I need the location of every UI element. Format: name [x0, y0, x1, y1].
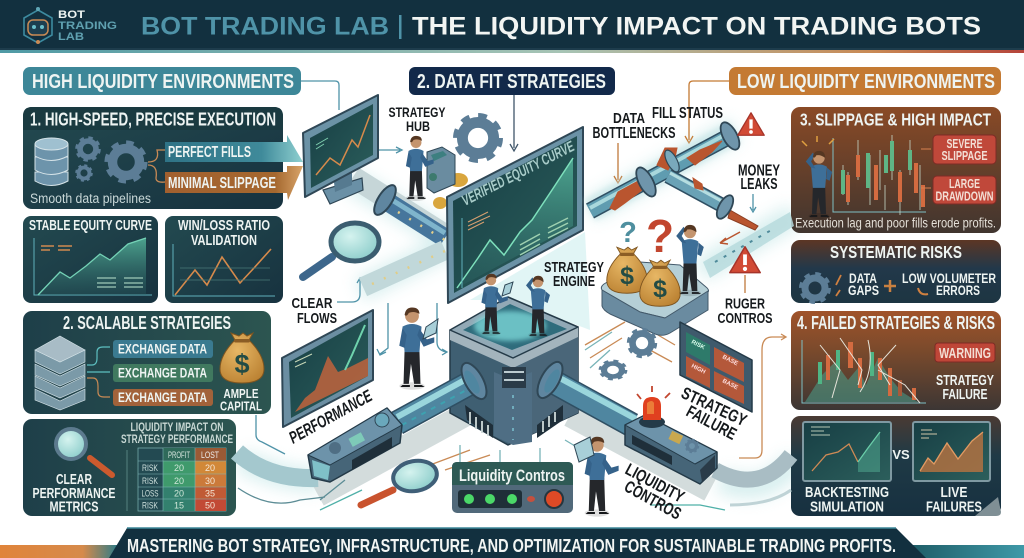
table: liquidity impact: PROFIT	[168, 450, 190, 460]
label: strategy engine: STRATEGY	[544, 260, 604, 276]
panel: clear performance metrics	[23, 419, 236, 516]
panel: win/loss ratio validation: WIN/LOSS RATIO	[178, 218, 270, 234]
table: liquidity impact: LOSS	[142, 488, 158, 498]
monitor: verified equity curve	[447, 127, 583, 303]
label: strategy hub: HUB	[406, 118, 430, 134]
screen: risk grid: BASE	[721, 354, 739, 367]
panel: backtesting vs live failures: FAILURES	[926, 498, 982, 516]
labels: exchange data: EXCHANGE DATA	[118, 364, 207, 380]
label: fill status: FILL STATUS	[652, 105, 723, 122]
label: strategy engine: ENGINE	[553, 274, 595, 290]
logo: BOT	[58, 9, 85, 21]
title	[141, 12, 981, 40]
label: money leaks: MONEY	[738, 162, 780, 180]
panel: high-speed precise execution: 1. HIGH-SPEED, PRECISE EXECUTION	[30, 110, 276, 130]
table: liquidity impact: 20	[205, 463, 215, 473]
screen: risk grid: HIGH	[690, 363, 706, 376]
label: clear flows	[292, 295, 337, 327]
panel: stable equity curve: STABLE EQUITY CURVE	[29, 218, 152, 234]
flow: right lower stream	[715, 455, 791, 505]
label: performance: PERFORMANCE	[286, 386, 376, 447]
label: strategy failure: FAILURE	[683, 402, 740, 444]
label: liquidity controls: CONTROS	[621, 477, 684, 524]
pipeline: rusty bottleneck pipes	[590, 119, 758, 230]
panel: clear performance metrics: CLEAR	[56, 472, 92, 488]
panel: systematic risks	[791, 240, 1001, 303]
table: liquidity impact: RISK	[142, 463, 158, 473]
panel: high liquidity heading: HIGH LIQUIDITY ENVIRONMENTS	[32, 71, 294, 93]
chart: backtest screen	[803, 422, 891, 481]
flow: low liquidity stream	[703, 212, 794, 278]
table: liquidity impact: RISK	[142, 500, 158, 510]
screen: risk grid: RISK	[690, 339, 706, 352]
panel: scalable strategies: 2. SCALABLE STRATEGIES	[63, 313, 231, 333]
label: strategy hub	[388, 104, 446, 134]
callout: large drawdown: DRAWDOWN	[936, 190, 994, 204]
panel: backtesting vs live failures: VS	[892, 447, 910, 462]
panel: systematic risks: DATA	[849, 271, 877, 286]
label: strategy failure: STRATEGY	[678, 383, 750, 430]
title: BOT TRADING LAB	[141, 12, 389, 40]
logo	[24, 7, 117, 44]
people on hub	[481, 274, 550, 338]
panel: win/loss ratio validation: VALIDATION	[191, 233, 257, 249]
glow behind flows	[240, 130, 795, 487]
panel: win/loss ratio validation	[165, 216, 283, 303]
panel: failed strategies and risks	[791, 311, 1001, 410]
platform: money bags: ?	[646, 210, 674, 262]
chart: live screen	[913, 422, 990, 481]
panel: failed strategies and risks: FAILURE	[942, 387, 988, 403]
platform: money bags: ?	[619, 217, 637, 249]
panel: clear performance metrics: PERFORMANCE	[32, 486, 116, 502]
pipeline: left hub pipe	[397, 359, 492, 425]
connector lines	[238, 81, 786, 510]
monitor: top left trading screen	[303, 95, 378, 204]
bar: minimal slippage: MINIMAL SLIPPAGE	[168, 175, 276, 192]
panel: backtesting vs live failures	[791, 416, 1001, 516]
logo: LAB	[58, 31, 84, 43]
callout: warning	[935, 343, 995, 362]
panel: scalable strategies	[23, 311, 271, 414]
label: data bottlenecks: DATA	[613, 111, 645, 127]
panel: clear performance metrics: METRICS	[50, 500, 99, 516]
callout: large drawdown: LARGE	[949, 177, 980, 191]
callout: severe slippage: SLIPPAGE	[942, 149, 988, 163]
panel: liquidity controls	[452, 462, 573, 513]
panel: high-speed precise execution	[23, 107, 303, 209]
logo: TRADING	[58, 20, 117, 32]
label: ruger controls: CONTROS	[718, 310, 772, 327]
panel: clear performance metrics: LIQUIDITY IMPACT ON	[130, 422, 224, 434]
panel: systematic risks: ERRORS	[936, 283, 980, 298]
table: liquidity impact: 50	[205, 500, 215, 510]
callout: severe slippage	[933, 135, 996, 164]
person: operator with tablet	[574, 437, 619, 517]
table: liquidity impact: RISK	[142, 476, 158, 486]
bar: minimal slippage	[165, 166, 303, 200]
table: liquidity impact: 35	[205, 488, 215, 498]
module: alarm connector	[625, 386, 717, 484]
icon: database	[35, 138, 68, 186]
panel: clear performance metrics: STRATEGY PERFORMANCE	[121, 434, 233, 446]
panel: high-speed precise execution: Smooth data pipelines	[30, 191, 151, 206]
label: clear flows: FLOWS	[297, 310, 337, 327]
panel: systematic risks: LOW VOLUMETER	[902, 271, 996, 286]
panel: scalable strategies: CAPITAL	[220, 400, 262, 414]
icon: warning top	[738, 113, 764, 135]
label: money leaks: LEAKS	[740, 176, 778, 193]
labels: exchange data: EXCHANGE DATA	[118, 340, 207, 356]
panel: stable equity curve	[23, 216, 158, 303]
table: liquidity impact: 15	[174, 500, 184, 510]
footer banner	[0, 528, 1024, 558]
panel: systematic risks: SYSTEMATIC RISKS	[830, 242, 962, 262]
table: liquidity impact: 20	[174, 463, 184, 473]
icon: magnifier lower	[361, 457, 439, 505]
panel: slippage and high impact	[791, 107, 1001, 233]
table: liquidity impact	[138, 448, 226, 511]
heading: data fit strategies: 2. DATA FIT STRATEGIES	[417, 71, 606, 93]
screen: risk grid: BASE	[721, 378, 739, 391]
panel: high liquidity heading	[23, 67, 301, 95]
module: left connector	[308, 408, 402, 482]
ground shadows under pipes	[318, 412, 710, 495]
callout: warning: WARNING	[939, 345, 991, 362]
bar: perfect fills	[165, 135, 303, 162]
panel: backtesting vs live failures: SIMULATION	[810, 498, 884, 516]
monitor: verified equity curve: VERIFIED EQUITY CURVE	[459, 138, 578, 210]
callout: severe slippage: SEVERE	[946, 137, 982, 151]
chart: candlesticks	[841, 135, 925, 215]
panel: failed strategies and risks: STRATEGY	[936, 373, 994, 389]
label: ruger controls	[718, 296, 772, 327]
panel: systematic risks: GAPS	[848, 283, 879, 298]
terminal: strategy hub kiosk	[427, 147, 468, 209]
label: clear flows: CLEAR	[292, 295, 333, 312]
label: data bottlenecks: BOTTLENECKS	[592, 125, 676, 142]
panel: liquidity controls: Liquidity Contros	[459, 466, 565, 485]
icon: magnifier	[56, 429, 112, 475]
icon: magnifier clear flows	[303, 223, 379, 277]
platform: money bags	[601, 210, 708, 335]
flow: left lower stream	[237, 452, 318, 478]
label: strategy engine	[544, 260, 604, 290]
pipeline: right hub pipe	[532, 358, 636, 425]
label: liquidity controls: LIQUIDITY	[622, 460, 688, 507]
labels: exchange data	[113, 340, 213, 406]
label: money leaks	[738, 162, 780, 193]
callout: large drawdown	[933, 176, 996, 204]
table: liquidity impact: 20	[174, 488, 184, 498]
icon: server stack	[35, 336, 85, 410]
label: ruger controls: RUGER	[725, 296, 765, 312]
screen: risk grid	[680, 322, 752, 412]
label: strategy hub: STRATEGY	[388, 104, 446, 120]
bar: perfect fills: PERFECT FILLS	[168, 144, 251, 161]
panel: scalable strategies: AMPLE	[224, 387, 258, 401]
light beam under equity monitor	[470, 232, 590, 330]
icon: warning lower	[730, 247, 760, 273]
title: THE LIQUIDITY IMPACT ON TRADING BOTS	[412, 12, 981, 40]
icon: large gear	[457, 117, 499, 159]
table: liquidity impact: 30	[205, 476, 215, 486]
person: analyst with tablet	[399, 308, 438, 390]
icon: red alarm light	[637, 386, 670, 428]
gears lower right	[601, 330, 655, 379]
label: data bottlenecks	[592, 111, 676, 142]
panel: backtesting vs live failures: BACKTESTING	[805, 484, 889, 501]
chart: failing candlesticks	[805, 338, 920, 403]
table: liquidity impact: 20	[174, 476, 184, 486]
header bar	[0, 0, 1024, 53]
labels: exchange data: EXCHANGE DATA	[118, 389, 207, 405]
pipeline: upper left flow	[353, 177, 445, 287]
table: liquidity impact: LOST	[201, 450, 219, 460]
panel: backtesting vs live failures: LIVE	[940, 484, 968, 501]
person: worried trader	[676, 225, 704, 296]
person: hub operator	[406, 136, 434, 201]
central strategy engine hub	[450, 297, 578, 445]
heading: data fit strategies	[409, 67, 615, 95]
monitor: performance	[282, 310, 373, 427]
